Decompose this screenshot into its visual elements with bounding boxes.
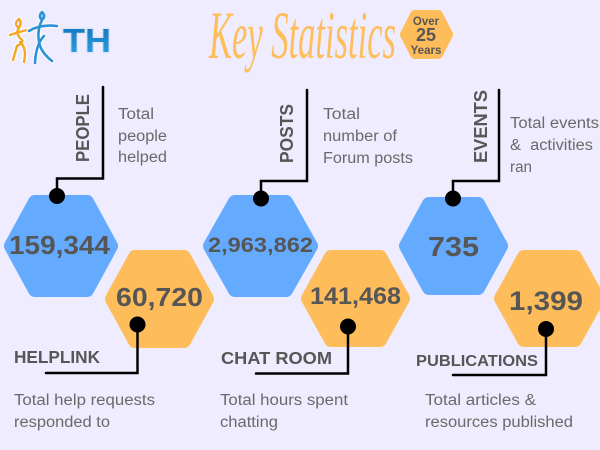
hexagon: 1,399: 1,399 [509, 286, 583, 316]
text: events description: Total events [510, 115, 599, 132]
text: posts description: Total [323, 106, 360, 123]
hexagon: 1,399 [501, 257, 598, 340]
panel: events [406, 90, 599, 288]
text: posts description [323, 106, 413, 167]
text: people description: people [118, 128, 167, 145]
connector: publications [453, 321, 554, 375]
badge: over 25 years [405, 15, 448, 57]
text: publications description [425, 392, 573, 431]
label: people: PEOPLE [72, 94, 93, 162]
connector: people [49, 87, 103, 204]
hexagon: 60,720: 60,720 [116, 284, 203, 312]
panel: helplink [14, 257, 207, 431]
label: publications: PUBLICATIONS [416, 353, 538, 370]
text: helplink description: Total help requests [14, 392, 155, 409]
logo letters: TH [63, 22, 111, 59]
text: events description: ran [510, 159, 532, 176]
text: people description: Total [118, 106, 154, 123]
panel: publications [416, 257, 598, 431]
text: helplink description: responded to [14, 414, 110, 431]
label: events: EVENTS [470, 90, 491, 163]
connector: chat room [256, 318, 356, 374]
badge: over 25 years: Over [413, 16, 440, 28]
text: chat room description: chatting [220, 414, 278, 431]
text: posts description: number of [323, 128, 398, 145]
text: events description: & activities [510, 137, 593, 154]
label: chat room: CHAT ROOM [221, 348, 332, 368]
hexagon: 60,720 [112, 257, 207, 341]
hexagon: 2,963,862 [208, 202, 313, 290]
panel: posts [208, 90, 413, 290]
hexagon: 141,468: 141,468 [310, 283, 401, 310]
connector: posts [253, 90, 307, 206]
text: people description [118, 106, 167, 166]
hexagon: 735: 735 [428, 231, 479, 262]
panel: chat room [220, 257, 403, 431]
icon: orange figure [10, 19, 27, 62]
hexagon: 141,468 [308, 257, 403, 340]
badge: over 25 years: 25 [416, 25, 436, 45]
logo: TH with dancing figures [10, 12, 111, 63]
text: publications description: Total articles & [425, 392, 537, 409]
text: people description: helped [118, 149, 167, 166]
badge: over 25 years: Years [411, 45, 441, 57]
connector: events [445, 90, 499, 206]
connector: helplink [46, 316, 146, 373]
text: publications description: resources published [425, 414, 573, 431]
icon: blue figure [29, 12, 57, 63]
text: helplink description [14, 392, 155, 431]
label: helplink: HELPLINK [14, 347, 100, 367]
hexagon: 159,344: 159,344 [9, 232, 111, 260]
hexagon: 159,344 [9, 202, 111, 290]
text: posts description: Forum posts [323, 150, 413, 167]
hexagon: 735 [406, 204, 501, 288]
text: events description [510, 115, 599, 176]
label: posts: POSTS [276, 104, 297, 163]
text: chat room description: Total hours spent [220, 392, 349, 409]
hexagon: 2,963,862: 2,963,862 [208, 234, 313, 257]
text: chat room description [220, 392, 349, 431]
panel: people [9, 87, 167, 290]
